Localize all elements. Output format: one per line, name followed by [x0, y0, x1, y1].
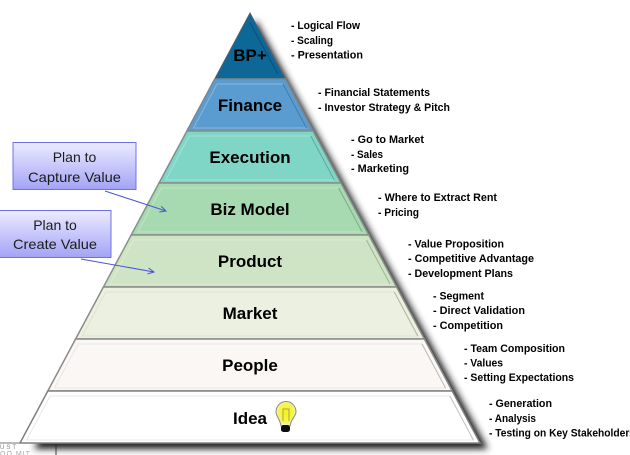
list: People: - Team Composition: [464, 343, 565, 355]
list: Finance: [318, 87, 450, 114]
icon: light bulb: [276, 402, 296, 432]
list: Finance: - Investor Strategy & Pitch: [318, 102, 450, 114]
callout: Plan to Create Value: Plan to: [33, 217, 77, 233]
list: People: [464, 343, 574, 384]
list: Idea: - Analysis: [489, 413, 536, 425]
list: Idea: [489, 398, 630, 440]
band: Market: [76, 287, 424, 339]
list: Market: - Direct Validation: [433, 305, 525, 317]
list: Execution: - Go to Market: [351, 134, 424, 146]
list: Execution: - Marketing: [351, 163, 409, 175]
list: Market: - Segment: [433, 290, 484, 302]
list: Product: - Competitive Advantage: [408, 253, 534, 265]
list: Execution: - Sales: [351, 149, 383, 161]
band: Biz Model: Biz Model: [210, 200, 290, 219]
list: Idea: - Generation: [489, 398, 552, 410]
band: People: People: [222, 356, 278, 375]
footer remnant: cropped slide text: [0, 442, 56, 455]
band: BP+: BP+: [233, 46, 267, 65]
band: Biz Model: [131, 183, 369, 235]
callout: Plan to Capture Value: Plan to: [53, 149, 97, 165]
list: BP+: - Logical Flow: [291, 20, 360, 32]
list: Biz Model: - Pricing: [378, 207, 419, 219]
callout: Plan to Create Value: [0, 210, 111, 258]
band: BP+: [215, 13, 285, 79]
band: People: [48, 339, 452, 391]
band: Idea: [20, 391, 480, 443]
callout: Plan to Create Value: Create Value: [13, 236, 97, 252]
list: Market: - Competition: [433, 320, 503, 332]
band: Product: Product: [218, 252, 282, 271]
arrow: capture value to Biz Model: [105, 191, 166, 211]
callout: Plan to Capture Value: [13, 142, 136, 190]
list: Product: [408, 238, 534, 280]
band: Execution: Execution: [209, 148, 291, 167]
footer remnant: cropped slide text: UST: [0, 445, 18, 451]
list: People: - Setting Expectations: [464, 372, 574, 384]
list: BP+: [291, 20, 363, 62]
callout: Plan to Capture Value: Capture Value: [28, 169, 121, 185]
list: Finance: - Financial Statements: [318, 87, 430, 99]
pyramid shadow: [34, 20, 488, 449]
pyramid: [20, 13, 480, 443]
list: BP+: - Scaling: [291, 35, 333, 47]
list: Biz Model: [378, 192, 497, 219]
list: BP+: - Presentation: [291, 50, 363, 62]
band: Finance: [187, 79, 313, 131]
band: Finance: Finance: [218, 96, 282, 115]
list: Market: [433, 290, 525, 332]
list: Execution: [351, 134, 424, 175]
band: Idea: Idea: [233, 409, 268, 428]
band: Product: [103, 235, 397, 287]
arrow: create value to Product: [81, 259, 154, 272]
list: Product: - Development Plans: [408, 268, 513, 280]
band: Market: Market: [223, 304, 278, 323]
band: Execution: [159, 131, 341, 183]
list: Biz Model: - Where to Extract Rent: [378, 192, 497, 204]
list: Product: - Value Proposition: [408, 238, 504, 250]
list: People: - Values: [464, 358, 503, 370]
